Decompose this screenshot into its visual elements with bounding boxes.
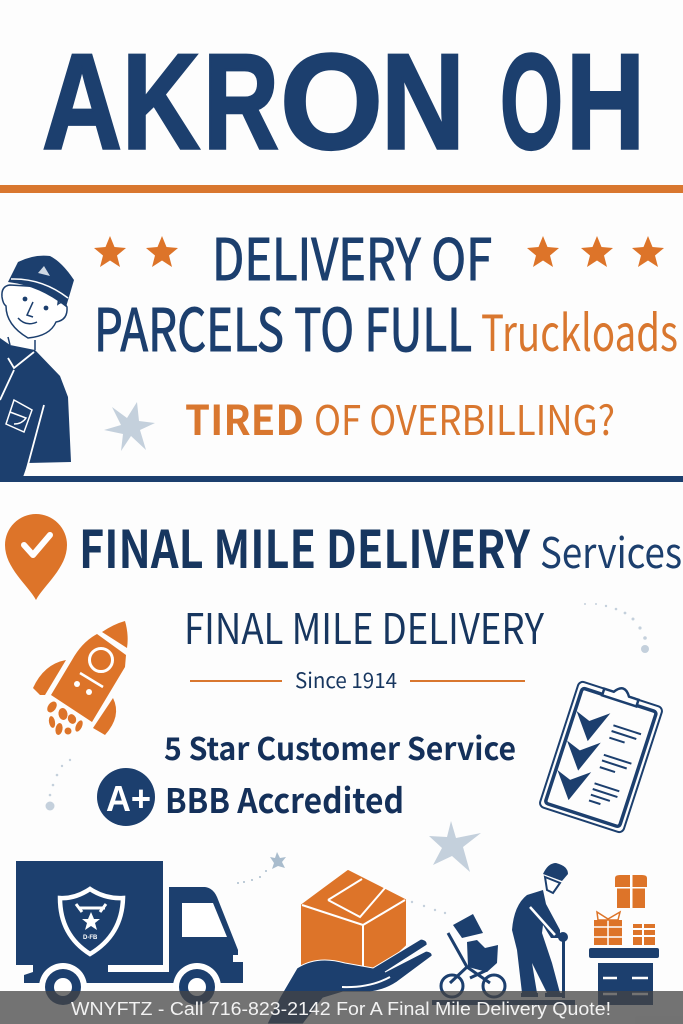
tagline: tired of overbilling xyxy=(185,387,615,447)
icon: rocket xyxy=(33,621,128,736)
courier illustration xyxy=(0,256,74,479)
title: A xyxy=(42,26,122,178)
dotted arc: lower left xyxy=(46,759,71,810)
infographic canvas: O xyxy=(280,26,383,178)
heading: delivery of: DELIVERY OF xyxy=(212,215,492,297)
infographic canvas: N xyxy=(381,26,465,178)
man head xyxy=(543,863,568,881)
stars: left orange pair xyxy=(94,236,178,267)
truck cab and frame xyxy=(24,887,243,983)
star: small grey with trail xyxy=(237,852,286,884)
truck wheels xyxy=(39,963,87,1011)
text: bbb accredited: BBB Accredited xyxy=(165,774,404,823)
truck shield emblem xyxy=(60,889,123,954)
courier head xyxy=(2,285,67,338)
dresser xyxy=(589,948,659,958)
middle gift xyxy=(594,920,622,945)
heading: parcels to full truckloads: PARCELS TO FULL xyxy=(94,283,472,368)
top gift xyxy=(615,875,647,908)
footer caption bar xyxy=(0,991,683,1024)
subheading: final mile delivery: FINAL MILE DELIVERY xyxy=(184,596,545,657)
text: 5 star customer service: 5 Star Customer Service xyxy=(164,724,516,769)
truck window xyxy=(182,903,227,937)
infographic canvas: R xyxy=(203,26,279,178)
badge: a+: A+ xyxy=(106,778,151,819)
icon: location pin xyxy=(5,514,67,600)
footer caption bar: WNYFTZ - Call 716-823-2142 For A Final Mile Delivery Quote! xyxy=(71,999,611,1019)
infographic canvas: K xyxy=(122,26,200,178)
icon: hand xyxy=(267,939,432,1024)
truck cargo box xyxy=(16,861,163,965)
truck illustration xyxy=(16,861,243,1011)
courier pocket xyxy=(6,400,32,432)
gifts and dresser xyxy=(589,875,659,1005)
infographic canvas: O xyxy=(500,26,563,178)
star: large grey xyxy=(429,821,481,872)
infographic canvas: H xyxy=(566,26,645,178)
icon: stroller xyxy=(441,914,505,997)
dotted arc: upper right xyxy=(584,603,649,653)
tagline: tired of overbilling: TIRED xyxy=(185,387,304,447)
tagline: tired of overbilling: OF OVERBILLING? xyxy=(314,387,615,447)
since 1914 label: Since 1914 xyxy=(295,665,397,695)
icon: parcel box xyxy=(302,871,405,975)
icon: clipboard xyxy=(539,675,665,833)
badge: a+ xyxy=(97,768,155,826)
dotted trail xyxy=(411,901,446,914)
courier cap xyxy=(8,256,74,307)
star: grey xyxy=(104,402,155,451)
small gift xyxy=(633,924,655,945)
courier body xyxy=(0,338,71,479)
heading: final mile delivery services: FINAL MILE DELIVERY xyxy=(79,508,531,583)
truck illustration: D-FB xyxy=(83,935,98,941)
icon: elderly man with cane xyxy=(432,863,575,1005)
stars: right orange trio xyxy=(527,236,664,267)
man body xyxy=(512,890,560,993)
